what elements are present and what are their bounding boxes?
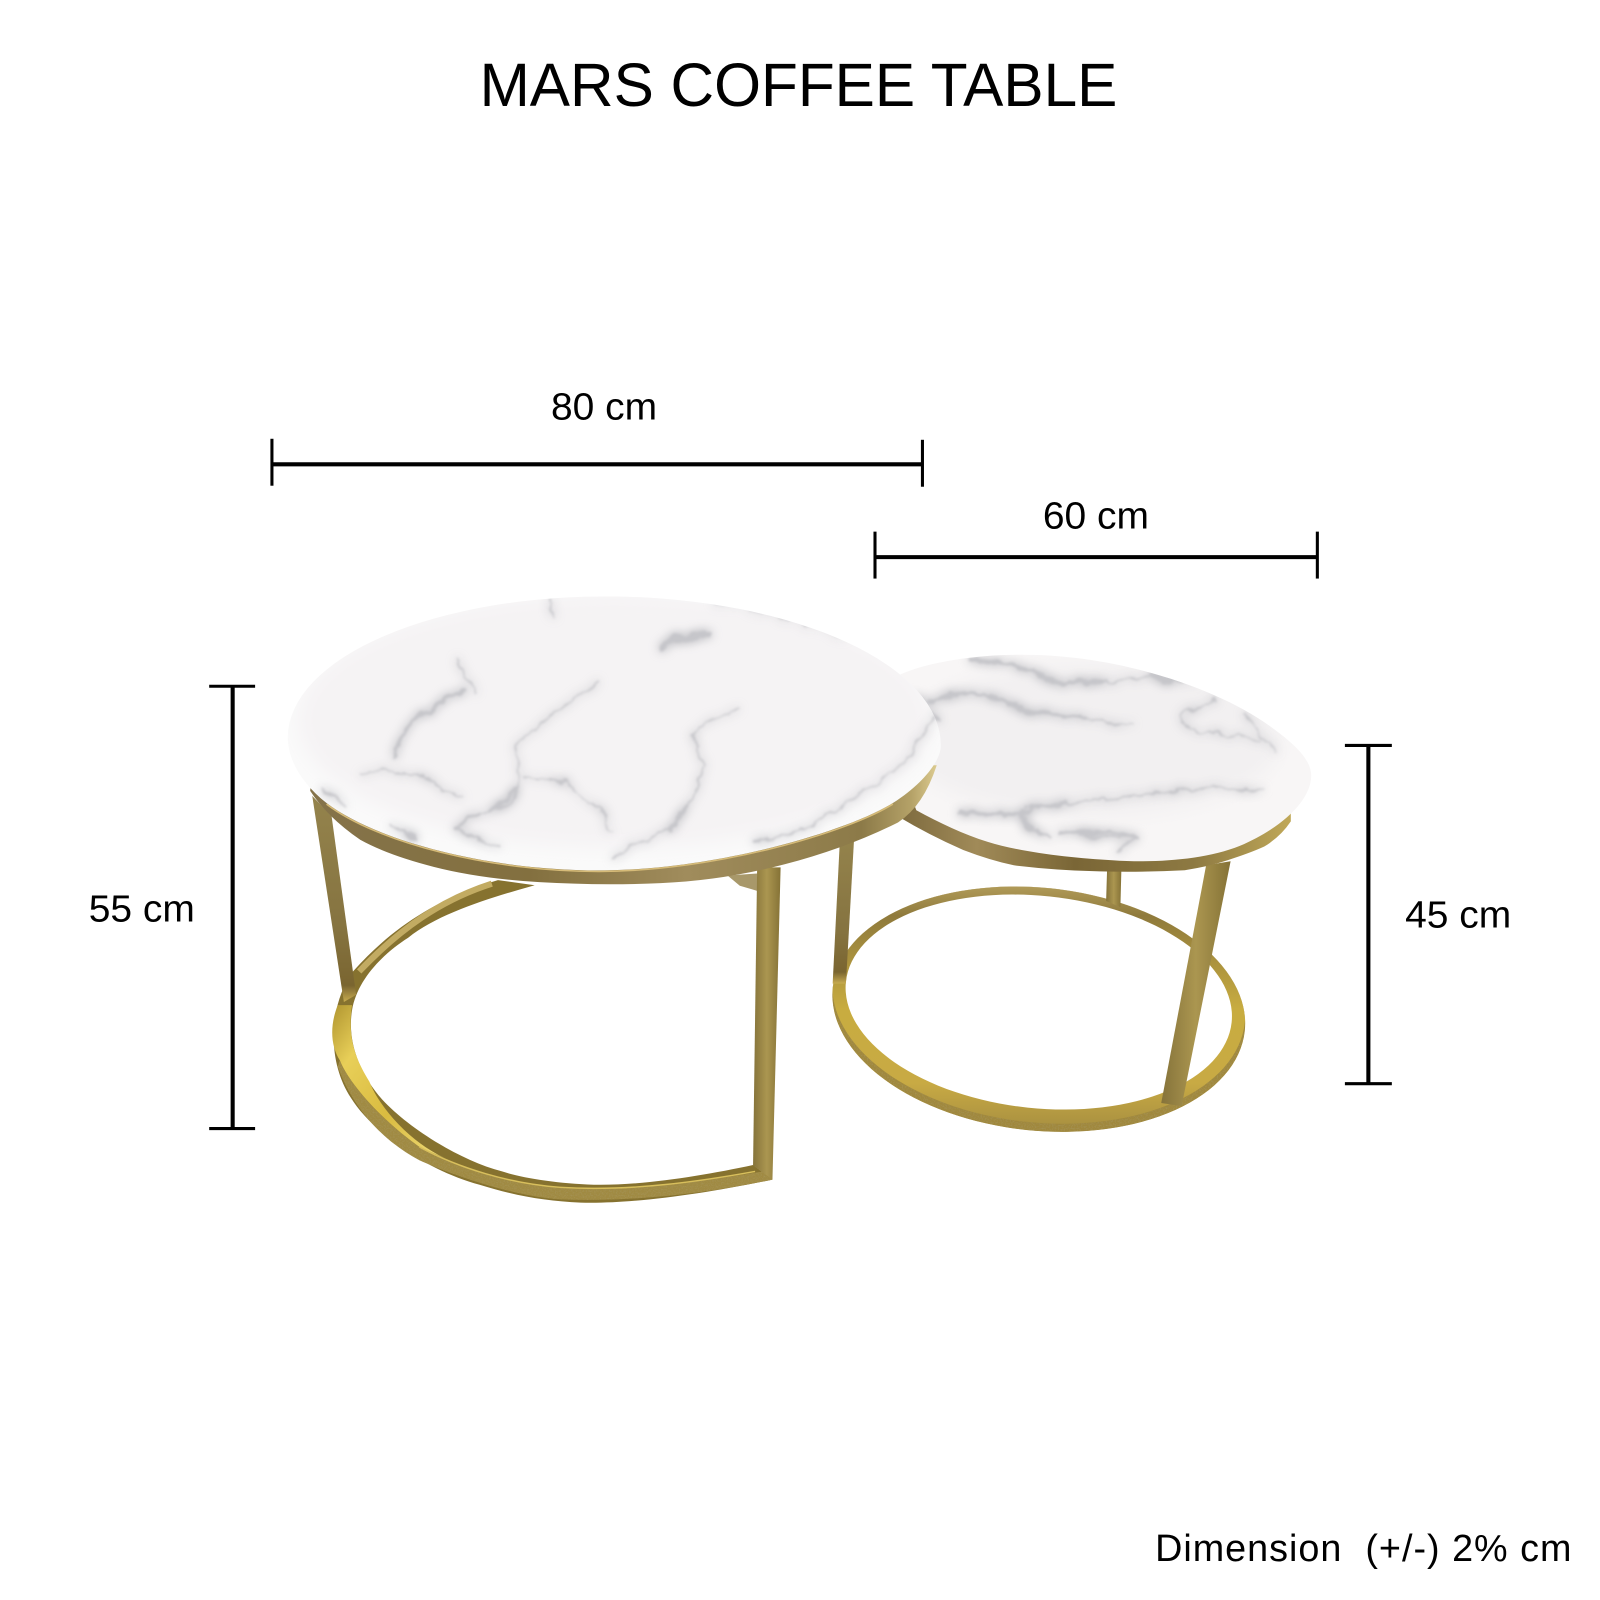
marble lower edge highlight <box>327 804 893 871</box>
small table marble top <box>888 655 1311 861</box>
small table (60 cm) <box>832 655 1311 1132</box>
dimension: 45 cm height: 45 cm <box>1405 894 1511 936</box>
small table gold frame <box>898 776 1291 872</box>
large table gold frame <box>310 765 937 884</box>
large table legs <box>312 796 781 1180</box>
dimension: 55 cm height: 55 cm <box>89 887 195 929</box>
small table legs <box>833 839 1231 1106</box>
large table base ring <box>332 880 772 1203</box>
tolerance note: Dimension (+/-) 2% cm <box>1155 1527 1571 1569</box>
large table (80 cm) <box>288 593 941 1203</box>
large table marble top <box>288 593 941 871</box>
dimension: 80 cm width: 80 cm <box>551 385 657 427</box>
small table base ring <box>832 878 1245 1132</box>
title: MARS COFFEE TABLE <box>480 51 1117 119</box>
dimension: 60 cm width: 60 cm <box>1043 495 1149 537</box>
